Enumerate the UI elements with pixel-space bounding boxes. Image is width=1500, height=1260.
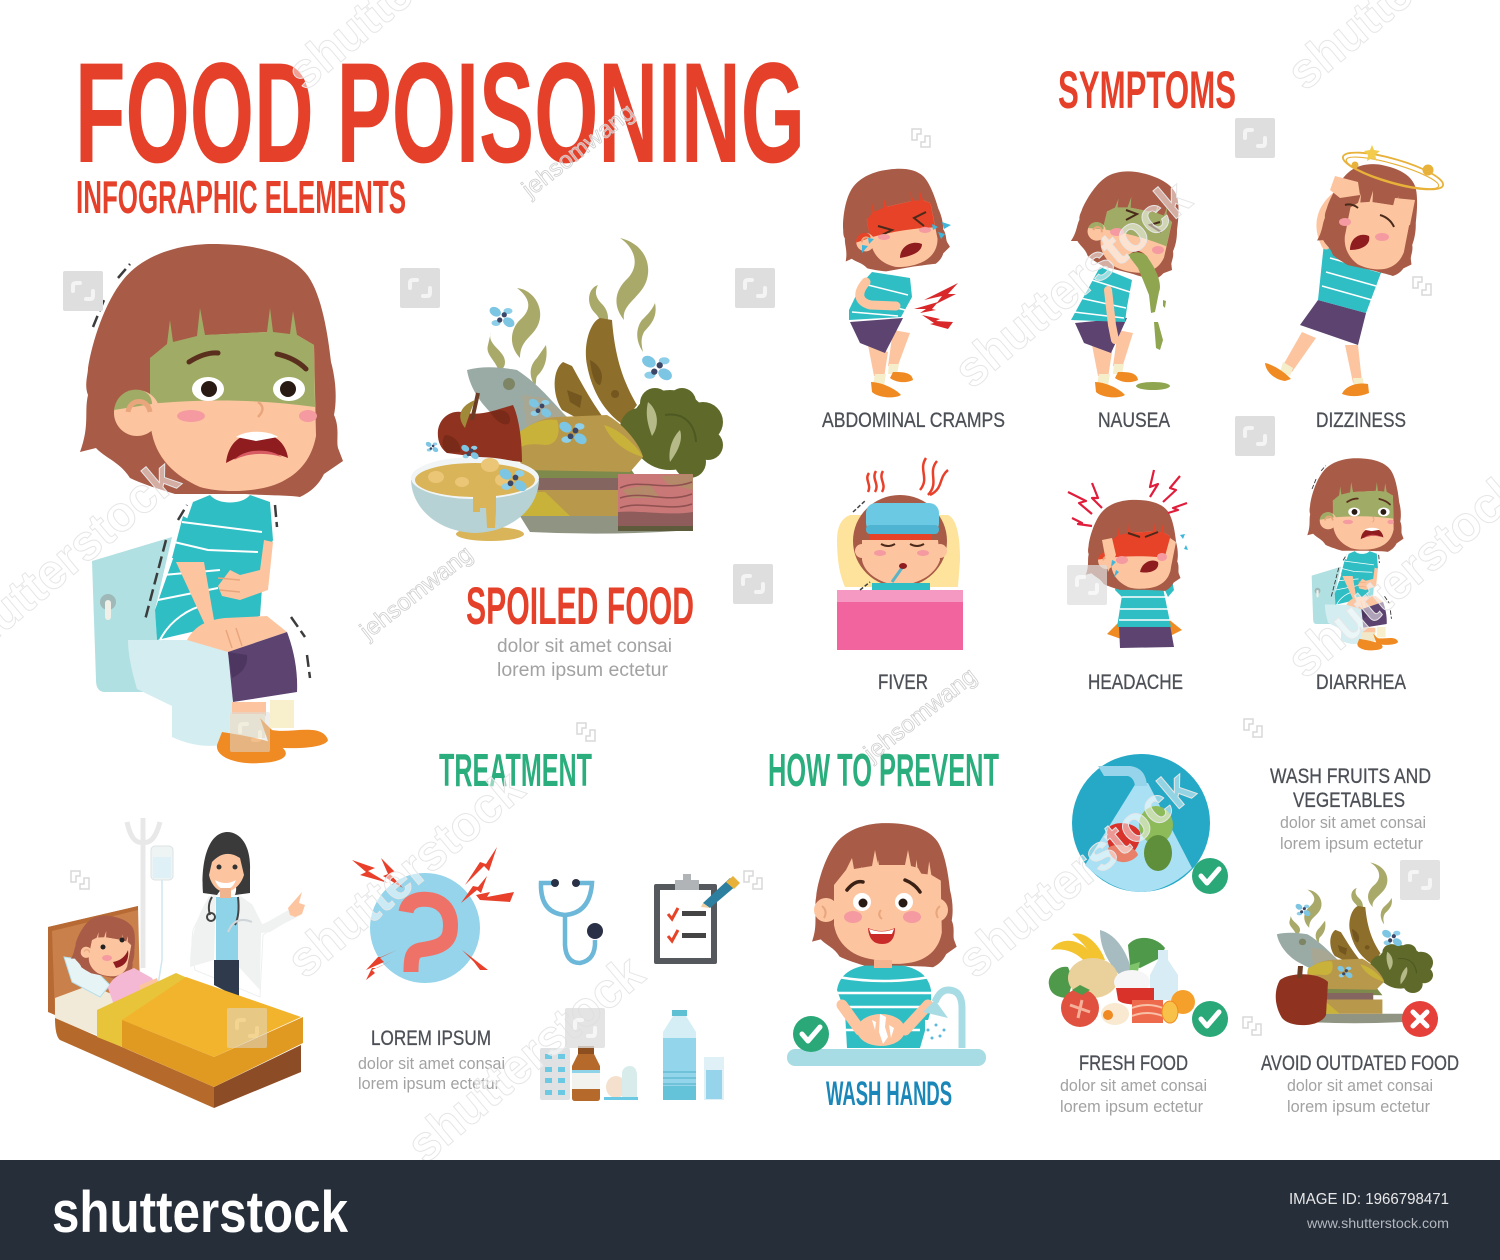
symptom: nausea: [1066, 160, 1193, 397]
text: lorem ipsum: dolor sit amet consai: [358, 1054, 505, 1073]
symptom: headache: [1068, 470, 1188, 648]
footer bar: [0, 1160, 1500, 1260]
text: wash fruits and vegetables: [1270, 765, 1431, 853]
text: avoid outdated food: lorem ipsum ectetur: [1287, 1097, 1430, 1116]
illustration: outdated food: [1276, 862, 1438, 1037]
text: avoid outdated food: dolor sit amet consai: [1287, 1076, 1433, 1095]
text: fresh food: lorem ipsum ectetur: [1060, 1097, 1203, 1116]
label: abdominal cramps: ABDOMINAL CRAMPS: [822, 409, 1005, 432]
watermark overlay: shutterstock: [943, 169, 1201, 398]
watermark overlay: jehsomwang: [516, 98, 640, 203]
heading: symptoms: SYMPTOMS: [1058, 61, 1236, 120]
footer bar: www.shutterstock.com: [1306, 1215, 1449, 1231]
symptom: dizziness: [1265, 145, 1446, 396]
watermark overlay: shutterstock: [946, 759, 1204, 988]
symptom: fever in bed: [837, 458, 963, 650]
watermark overlay: jehsomwang: [858, 662, 982, 767]
illustration: sick girl on toilet: [80, 244, 343, 763]
label: nausea: NAUSEA: [1098, 409, 1170, 432]
watermark overlay: shutterstock: [276, 759, 534, 988]
illustration: spoiled food: [411, 238, 723, 541]
footer logo text: shutterstock: [52, 1180, 349, 1245]
text: avoid outdated food: [1261, 1052, 1459, 1116]
label: headache: HEADACHE: [1088, 671, 1183, 694]
text: wash fruits and vegetables: dolor sit amet consai: [1280, 813, 1426, 832]
watermark overlay: jehsomwang: [354, 540, 478, 645]
text: lorem ipsum: lorem ipsum ectetur: [358, 1074, 500, 1093]
text: lorem ipsum: LOREM IPSUM: [371, 1027, 491, 1050]
text: fresh food: [1060, 1052, 1207, 1116]
label: diarrhea: DIARRHEA: [1316, 671, 1406, 694]
heading: treatment: TREATMENT: [439, 744, 592, 796]
icon: water bottle and glass: [663, 1010, 724, 1100]
title: [75, 34, 805, 223]
heading: spoiled food: lorem ipsum ectetur: [497, 660, 669, 681]
text: wash fruits and vegetables: WASH FRUITS AND: [1270, 765, 1431, 788]
watermark overlay: shutterstock: [396, 944, 654, 1173]
illustration: washing vegetables: [1072, 754, 1228, 894]
icon: stethoscope: [541, 879, 603, 963]
text: wash fruits and vegetables: lorem ipsum ectetur: [1280, 834, 1423, 853]
icon: clipboard checklist: [654, 874, 740, 964]
label: dizziness: DIZZINESS: [1316, 409, 1406, 432]
symptom: abdominal cramps: [831, 161, 958, 397]
title: FOOD POISONING: [75, 34, 805, 193]
illustration: girl washing hands: [787, 823, 986, 1066]
illustration: doctor and girl in bed: [48, 818, 305, 1108]
icon: medicine: [540, 1046, 638, 1101]
footer image id: IMAGE ID: 1966798471: [1289, 1191, 1449, 1208]
text: lorem ipsum: [358, 1027, 505, 1093]
label: fiver: FIVER: [878, 671, 928, 694]
text: fresh food: FRESH FOOD: [1079, 1052, 1188, 1075]
label: wash hands: WASH HANDS: [826, 1075, 952, 1113]
text: fresh food: dolor sit amet consai: [1060, 1076, 1207, 1095]
illustration: fresh food: [1049, 930, 1228, 1037]
symptom: diarrhea: [1307, 458, 1404, 650]
text: wash fruits and vegetables: VEGETABLES: [1293, 789, 1405, 812]
spoiled food description: dolor sit amet consai: [497, 636, 672, 657]
icon: intestine pain: [352, 847, 514, 983]
subtitle: INFOGRAPHIC ELEMENTS: [76, 171, 406, 223]
heading: spoiled food: SPOILED FOOD: [466, 577, 694, 636]
heading: how to prevent: HOW TO PREVENT: [768, 744, 999, 796]
heading: spoiled food: [466, 577, 694, 681]
